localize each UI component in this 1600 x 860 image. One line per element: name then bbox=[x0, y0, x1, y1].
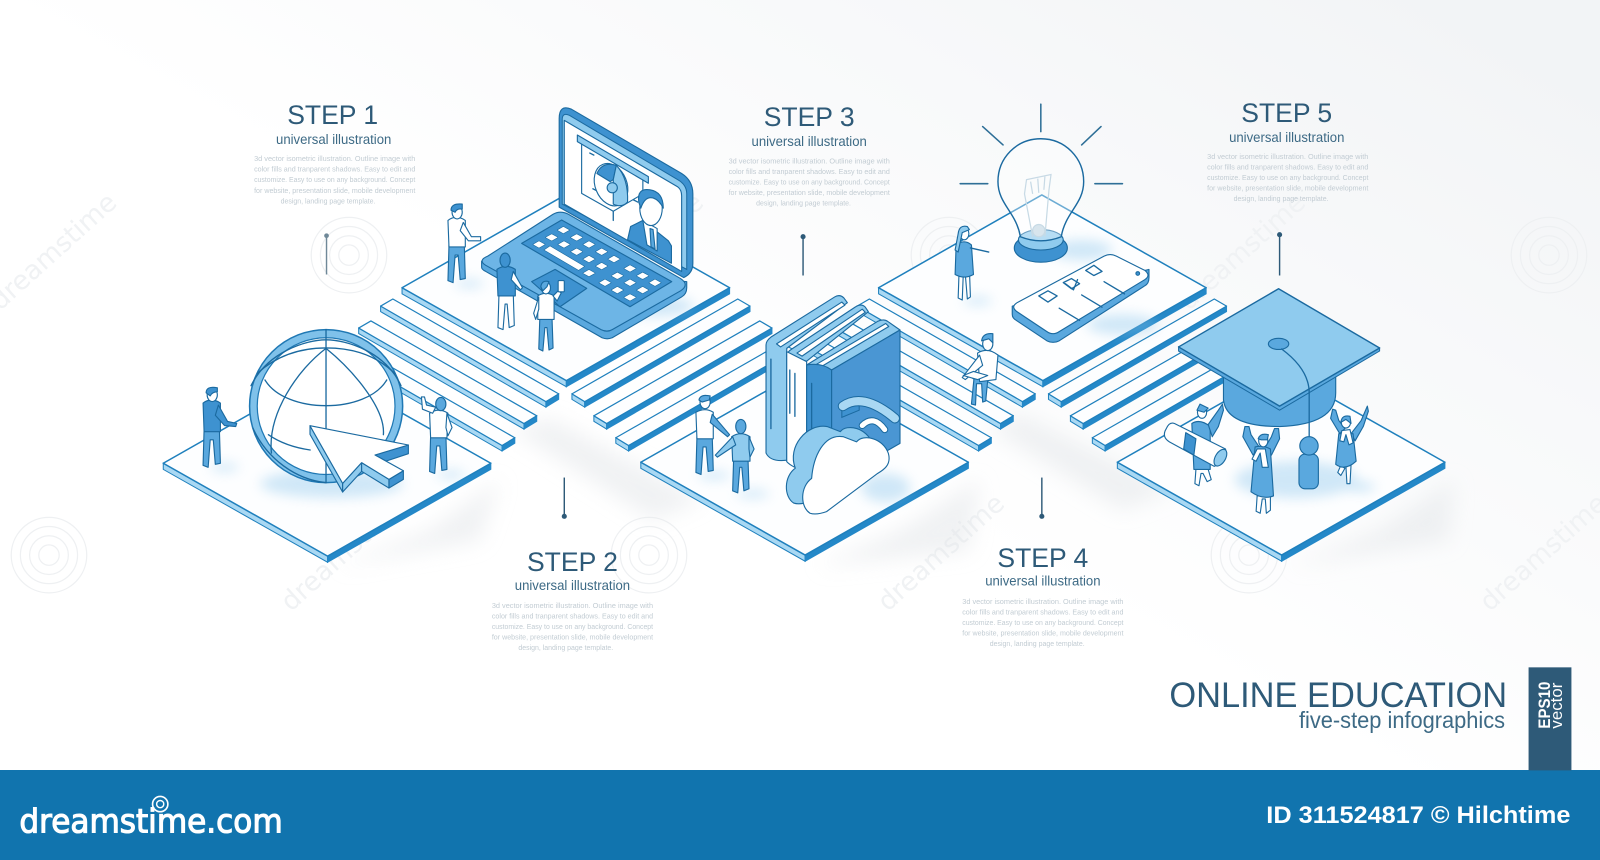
text block: step 4 bbox=[962, 543, 1124, 648]
text block: step 1: customize. Easy to use on any background. Concept bbox=[254, 175, 416, 184]
person: books left bbox=[696, 395, 730, 474]
text block: step 4: STEP 4 bbox=[997, 543, 1088, 573]
globe bbox=[250, 330, 403, 483]
text block: step 3: universal illustration bbox=[752, 134, 867, 150]
icon: light bulb bbox=[960, 104, 1122, 262]
book 2 bbox=[787, 305, 868, 472]
text block: step 3 bbox=[729, 102, 891, 207]
text block: step 1: STEP 1 bbox=[287, 100, 378, 130]
footer bar bbox=[0, 770, 1600, 860]
text block: step 1: 3d vector isometric illustration. Outline image with bbox=[254, 154, 415, 163]
wifi symbol bbox=[842, 401, 895, 430]
text block: step 5: color fills and tranparent shadows. Easy to edit and bbox=[1207, 163, 1368, 172]
person: graduate centre bbox=[1243, 427, 1280, 513]
person: globe left bbox=[203, 387, 237, 467]
cast shadows under the platforms bbox=[337, 413, 1454, 566]
cap button bbox=[1268, 338, 1289, 349]
text block: step 4: universal illustration bbox=[985, 574, 1101, 590]
connector bars: step 2 to step 3 bbox=[572, 299, 794, 451]
text block: step 4: 3d vector isometric illustration. Outline image with bbox=[962, 597, 1123, 606]
text block: step 5: design, landing page template. bbox=[1234, 194, 1329, 203]
bulb filament bbox=[1024, 174, 1051, 237]
connector bars: step 4 to step 5 bbox=[1048, 299, 1270, 451]
text block: step 5: 3d vector isometric illustration. Outline image with bbox=[1207, 152, 1368, 161]
person: graduate right bbox=[1331, 406, 1368, 484]
watermark pattern bbox=[0, 187, 1600, 617]
keyboard bbox=[522, 220, 672, 307]
text block: step 1: universal illustration bbox=[276, 132, 391, 148]
text block: step 1 bbox=[254, 100, 416, 205]
book 1 bbox=[766, 296, 847, 461]
person: laptop left bbox=[448, 204, 481, 283]
person: globe right bbox=[421, 397, 452, 473]
cloud bbox=[786, 426, 889, 514]
step 1 marker pin bbox=[324, 233, 329, 274]
text block: step 2 bbox=[492, 547, 654, 652]
text block: step 2: customize. Easy to use on any background. Concept bbox=[492, 622, 654, 631]
laptop screen bbox=[559, 108, 693, 278]
person: laptop front bbox=[534, 281, 564, 351]
badge: EPS10 vector: vector bbox=[1548, 682, 1566, 729]
presentation board bbox=[577, 135, 648, 220]
text block: step 3: STEP 3 bbox=[764, 102, 855, 132]
platform: step 3 bbox=[641, 369, 968, 561]
person: graduate with scroll bbox=[1164, 404, 1229, 486]
icon: globe with cursor bbox=[250, 330, 408, 492]
connector bars: step 1 to step 2 bbox=[337, 299, 559, 451]
pie chart on the board bbox=[588, 158, 634, 211]
text block: step 4: design, landing page template. bbox=[990, 639, 1085, 648]
text block: step 3: 3d vector isometric illustration. Outline image with bbox=[729, 156, 890, 165]
laptop base bbox=[482, 212, 687, 339]
soft blue shadows on platforms bbox=[210, 240, 1376, 502]
step 5 marker pin bbox=[1277, 232, 1282, 276]
bulb glass bbox=[998, 139, 1084, 241]
step 3 marker pin bbox=[801, 234, 806, 276]
text block: step 3: customize. Easy to use on any background. Concept bbox=[729, 177, 891, 186]
title bbox=[1169, 676, 1507, 733]
badge: EPS10 vector bbox=[1529, 667, 1571, 770]
badge: EPS10 vector: EPS10 bbox=[1536, 682, 1554, 729]
text block: step 5: universal illustration bbox=[1229, 130, 1344, 146]
person: laptop centre bbox=[497, 253, 522, 330]
keys bbox=[533, 227, 661, 301]
person: books right bbox=[715, 419, 754, 493]
text block: step 2: STEP 2 bbox=[527, 547, 618, 577]
step 2 marker pin bbox=[562, 478, 567, 519]
text block: step 4: color fills and tranparent shadows. Easy to edit and bbox=[962, 608, 1123, 617]
connector bars: step 3 to step 4 bbox=[813, 299, 1035, 451]
text block: step 2: universal illustration bbox=[515, 578, 630, 594]
text block: step 4: customize. Easy to use on any background. Concept bbox=[962, 618, 1124, 627]
platform: step 5 bbox=[1117, 369, 1445, 561]
text block: step 5: for website, presentation slide, mobile development bbox=[1207, 184, 1369, 193]
title: five-step infographics bbox=[1299, 707, 1505, 733]
text block: step 3: for website, presentation slide, mobile development bbox=[729, 188, 891, 197]
cap base bbox=[1223, 376, 1336, 427]
logo: dreamstime: dreamstime.com bbox=[19, 803, 283, 841]
image id credit: ID 311524817 © Hilchtime bbox=[1266, 802, 1570, 829]
watermark pattern: dreamstime bbox=[275, 488, 414, 617]
platform: step 2 bbox=[402, 195, 730, 387]
text block: step 1: color fills and tranparent shadows. Easy to edit and bbox=[254, 165, 415, 174]
text block: step 5 bbox=[1207, 98, 1369, 203]
presenter bust bbox=[628, 190, 671, 263]
text block: step 2: color fills and tranparent shadows. Easy to edit and bbox=[492, 612, 653, 621]
text block: step 2: for website, presentation slide, mobile development bbox=[492, 633, 654, 642]
cursor arrow bbox=[310, 426, 408, 492]
book 3 bbox=[807, 320, 900, 483]
icon: books with cloud and wifi bbox=[766, 296, 900, 514]
text block: step 1: for website, presentation slide, mobile development bbox=[254, 186, 416, 195]
icon: smartphone bbox=[1012, 255, 1149, 342]
text block: step 2: 3d vector isometric illustration. Outline image with bbox=[492, 601, 653, 610]
person: seated man bbox=[962, 334, 998, 405]
title: ONLINE EDUCATION bbox=[1169, 676, 1507, 715]
icon: graduation cap bbox=[1179, 289, 1380, 489]
watermark pattern: dreamstime bbox=[571, 187, 710, 316]
platform: step 1 bbox=[163, 370, 491, 562]
text block: step 1: design, landing page template. bbox=[281, 196, 376, 205]
text block: step 3: color fills and tranparent shadows. Easy to edit and bbox=[729, 167, 890, 176]
text block: step 3: design, landing page template. bbox=[756, 198, 851, 207]
text block: step 4: for website, presentation slide, mobile development bbox=[962, 629, 1124, 638]
watermark pattern: dreamstime bbox=[1173, 187, 1312, 316]
platform: step 4 bbox=[879, 195, 1206, 387]
bulb rays bbox=[960, 104, 1122, 184]
text block: step 5: customize. Easy to use on any background. Concept bbox=[1207, 173, 1369, 182]
bulb base bbox=[1014, 234, 1067, 262]
cap board bbox=[1179, 347, 1380, 410]
text block: step 5: STEP 5 bbox=[1241, 98, 1332, 128]
watermark pattern: dreamstime bbox=[872, 488, 1011, 617]
icon: laptop with video lesson bbox=[482, 108, 693, 339]
trackpad bbox=[532, 269, 587, 307]
step 4 marker pin bbox=[1039, 478, 1044, 519]
diploma scroll bbox=[1164, 423, 1229, 468]
tassel bbox=[1282, 349, 1318, 489]
person: woman near bulb bbox=[955, 226, 989, 300]
text block: step 2: design, landing page template. bbox=[518, 643, 613, 652]
